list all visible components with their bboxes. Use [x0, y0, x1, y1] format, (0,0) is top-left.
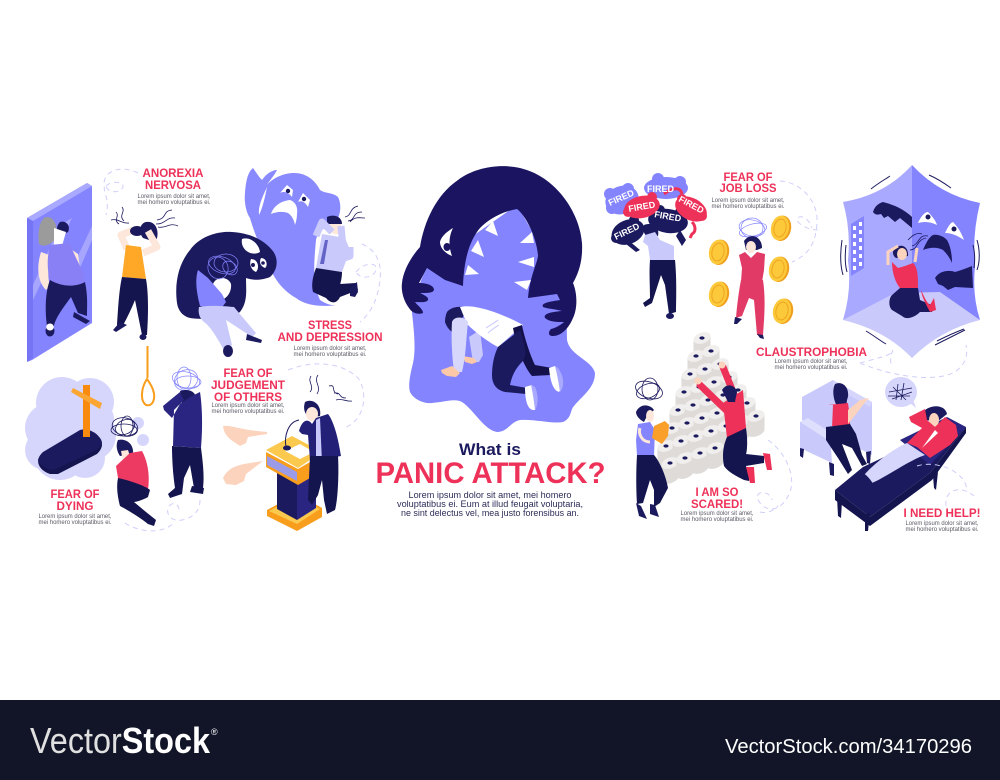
heading: fear of judgement — [211, 366, 286, 404]
text: help description: mei homero voluptatibus ei. — [906, 526, 979, 533]
man at podium — [299, 375, 352, 514]
text: judgement description: mei homero voluptatibus ei. — [212, 408, 285, 415]
text: job loss description: Lorem ipsum dolor sit amet, — [712, 197, 785, 204]
decorative dashed loop — [356, 244, 380, 322]
heading: fear of job loss — [720, 170, 776, 195]
panel: stress and depression — [176, 168, 382, 358]
heading: claustrophobia: CLAUSTROPHOBIA — [756, 345, 867, 359]
decorative dashed loop — [757, 440, 792, 513]
man hair — [445, 307, 470, 332]
heading: stress and depression: STRESS — [308, 318, 352, 332]
heading: i am so scared: I AM SO — [696, 485, 738, 499]
heading: i am so scared: SCARED! — [691, 497, 743, 511]
text: anorexia description: mei homero voluptatibus ei. — [138, 199, 211, 206]
thought cloud — [25, 377, 149, 480]
man far shoe — [549, 366, 563, 392]
crouching man — [441, 306, 563, 410]
heading: fear of judgement: JUDGEMENT — [211, 378, 286, 392]
text: judgement description — [212, 402, 285, 415]
heading: anorexia nervosa: NERVOSA — [145, 178, 201, 192]
decorative dashed loop — [104, 169, 138, 215]
man arms — [700, 367, 737, 410]
text: claustrophobia description: Lorem ipsum dolor sit amet, — [774, 358, 848, 365]
scribble above woman — [633, 378, 665, 402]
purple blob — [409, 205, 595, 432]
patient — [857, 406, 958, 488]
footer bar — [0, 700, 1000, 780]
text: dying description: mei homero voluptatibus ei. — [38, 519, 112, 526]
man near shoe — [525, 385, 538, 410]
speech bubble — [885, 377, 917, 408]
text: anorexia description — [138, 193, 211, 206]
man near sleeve — [452, 318, 468, 372]
speech clouds: fired: FIRED — [607, 188, 636, 208]
heading: fear of job loss: FEAR OF — [724, 170, 772, 184]
decorative dashed loop — [860, 345, 967, 377]
man far leg — [513, 325, 552, 376]
text: help description: Lorem ipsum dolor sit amet, — [906, 520, 979, 527]
text: anorexia description: Lorem ipsum dolor sit amet, — [138, 193, 211, 200]
podium — [266, 420, 322, 531]
panel: i am so scared — [633, 330, 792, 523]
speech clouds: fired: FIRED — [647, 184, 675, 194]
text: claustrophobia description — [774, 358, 848, 371]
panel: central panic attack illustration — [376, 166, 606, 519]
dark ghost — [176, 232, 277, 319]
woman in orange top — [111, 207, 178, 340]
footer image id: VectorStock.com/34170296 — [725, 736, 972, 758]
heading: fear of judgement: FEAR OF — [224, 366, 272, 380]
text: judgement description: Lorem ipsum dolor sit amet, — [212, 402, 285, 409]
therapist — [826, 383, 869, 474]
panel: fear of judgement — [211, 364, 364, 531]
heading: fear of dying: FEAR OF — [50, 487, 100, 501]
man far arm — [469, 330, 483, 362]
kneeling man — [312, 206, 365, 302]
man shoes — [746, 453, 772, 483]
vibration lines — [841, 175, 979, 345]
scribble above sitting man — [110, 415, 140, 439]
decorative dashed loop — [780, 181, 818, 262]
man near hand — [441, 366, 460, 377]
sitting man in red — [116, 440, 156, 526]
monster eye — [440, 228, 453, 256]
icon: mirror — [27, 183, 92, 362]
man hair — [722, 385, 737, 402]
speech clouds: fired: FIRED — [612, 221, 642, 242]
heading: i am so scared — [691, 485, 743, 511]
sitting figure with scribble — [196, 253, 262, 357]
heading: fear of dying: DYING — [56, 499, 94, 513]
decorative dashed loop — [917, 464, 974, 506]
icon: noose — [142, 346, 154, 405]
text: dying description — [38, 513, 112, 526]
logo registered mark: ® — [211, 727, 218, 737]
text: central description — [397, 490, 583, 519]
icon: grave and cross — [38, 385, 102, 474]
coins — [707, 214, 796, 326]
woman with box — [636, 405, 669, 519]
room — [843, 165, 980, 358]
panel: i need help — [800, 377, 980, 533]
monster — [402, 166, 582, 336]
text: central description: Lorem ipsum dolor sit amet, mei homero — [408, 490, 572, 501]
woman in pink with scribble — [734, 217, 768, 339]
heading: stress and depression: AND DEPRESSION — [278, 330, 382, 344]
panel: anorexia nervosa — [27, 166, 211, 362]
room window — [851, 216, 864, 276]
mirror reflection figure — [38, 217, 90, 336]
text: job loss description: mei homero voluptatibus ei. — [712, 203, 785, 210]
text: central description: ne sint delectus vel, mea justo forensibus an. — [401, 508, 579, 519]
man legs — [723, 428, 764, 481]
heading: anorexia nervosa: ANOREXIA — [142, 166, 204, 180]
text: scared description: mei homero voluptatibus ei. — [680, 516, 754, 523]
text: scared description — [680, 510, 754, 523]
speech clouds: fired: FIRED — [677, 194, 706, 216]
title: what is: What is — [459, 440, 521, 459]
man hands — [694, 362, 726, 384]
text: scared description: Lorem ipsum dolor sit amet, — [680, 510, 754, 517]
monster teeth — [465, 221, 534, 290]
man in shirt — [643, 224, 676, 319]
panel: claustrophobia — [756, 165, 980, 377]
heading: fear of dying — [50, 487, 100, 513]
text: help description — [906, 520, 979, 533]
text: stress description — [294, 345, 367, 358]
heading: fear of job loss: JOB LOSS — [720, 181, 776, 195]
decorative dashed arc — [288, 364, 364, 428]
speech clouds: fired: FIRED — [628, 199, 656, 214]
armchair — [800, 380, 872, 476]
heading: i need help: I NEED HELP! — [904, 506, 980, 520]
speech clouds: fired — [601, 173, 711, 252]
man torso — [723, 390, 746, 438]
text: dying description: Lorem ipsum dolor sit amet, — [38, 513, 112, 520]
panel: fear of dying — [25, 346, 204, 531]
decorative dashed loop — [125, 500, 200, 531]
heading: stress and depression — [278, 318, 382, 344]
couch — [835, 417, 966, 531]
panel: fear of job loss — [601, 170, 818, 339]
kneeling woman — [888, 233, 936, 318]
heading: anorexia nervosa — [142, 166, 204, 192]
text: stress description: mei homero voluptatibus ei. — [294, 351, 367, 358]
heading: fear of judgement: OF OTHERS — [214, 390, 282, 404]
logo: vectorstock: VectorStock — [30, 720, 211, 761]
text: central description: voluptatibus ei. Eum at illud feugait voluptaria, — [397, 499, 583, 510]
jumping man — [694, 362, 772, 483]
icon: pointing hands — [223, 426, 267, 485]
shirt wrinkles — [486, 320, 499, 333]
man far hand — [463, 356, 477, 364]
shadow monster — [873, 202, 973, 290]
standing man with scribble — [163, 366, 204, 498]
title: panic attack: PANIC ATTACK? — [376, 457, 606, 490]
text: job loss description — [712, 197, 785, 210]
man shirt — [460, 306, 523, 347]
man near leg — [492, 330, 527, 394]
text: claustrophobia description: mei homero voluptatibus ei. — [774, 364, 848, 371]
text: stress description: Lorem ipsum dolor sit amet, — [294, 345, 367, 352]
toilet paper pyramid — [656, 330, 766, 484]
speech clouds: fired: FIRED — [654, 209, 682, 224]
light ghost — [245, 168, 340, 306]
